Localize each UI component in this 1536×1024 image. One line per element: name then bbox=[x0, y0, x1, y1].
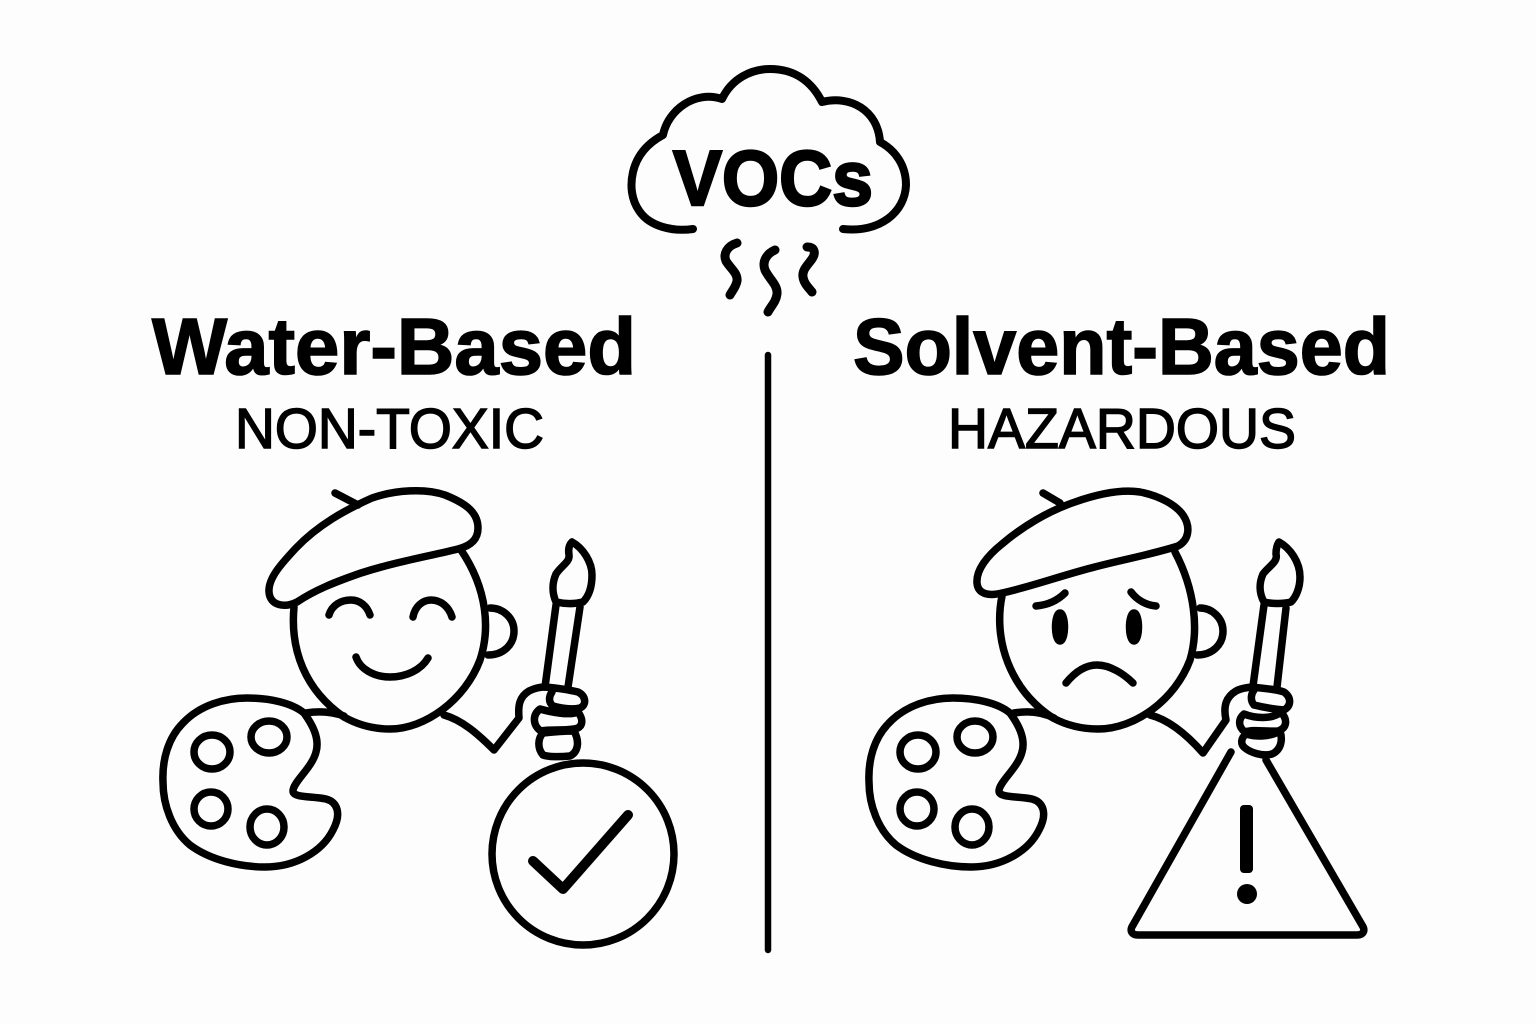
center divider bbox=[765, 355, 771, 950]
cloud outline bbox=[631, 69, 906, 230]
eyes bbox=[1056, 613, 1064, 641]
beret bbox=[977, 491, 1188, 594]
icon: warning triangle bbox=[1131, 752, 1364, 935]
shoulder bbox=[306, 712, 344, 716]
ear bbox=[1197, 608, 1223, 655]
brush bbox=[1260, 542, 1300, 604]
subheading: NON-TOXIC: NON-TOXIC bbox=[235, 397, 544, 461]
face bbox=[293, 550, 486, 729]
subheading: HAZARDOUS: HAZARDOUS bbox=[948, 397, 1296, 461]
cloud label: VOCs bbox=[673, 134, 873, 222]
heading: Solvent-Based: Solvent-Based bbox=[853, 302, 1390, 391]
paint wells bbox=[900, 735, 936, 769]
arm and hand bbox=[444, 687, 585, 757]
heading: Water-Based: Water-Based bbox=[152, 302, 636, 391]
worried brows bbox=[1036, 592, 1156, 606]
icon: check mark in circle bbox=[492, 763, 674, 945]
smiling eyes bbox=[329, 600, 452, 617]
shoulder bbox=[1014, 712, 1054, 718]
panel: happy painter with water-based paint bbox=[163, 491, 592, 867]
exclamation mark bbox=[1240, 805, 1253, 873]
panel: worried painter with solvent-based paint bbox=[869, 491, 1300, 867]
palette bbox=[163, 698, 338, 867]
fumes bbox=[725, 243, 814, 312]
paint wells bbox=[194, 735, 230, 769]
palette bbox=[869, 698, 1044, 867]
beret bbox=[269, 491, 478, 605]
arm and hand bbox=[1150, 687, 1290, 755]
smile bbox=[356, 657, 428, 677]
face bbox=[1000, 552, 1195, 729]
icon: VOCs cloud with fumes bbox=[631, 69, 906, 312]
frown bbox=[1066, 665, 1133, 683]
ear bbox=[488, 608, 514, 655]
brush bbox=[553, 542, 592, 604]
